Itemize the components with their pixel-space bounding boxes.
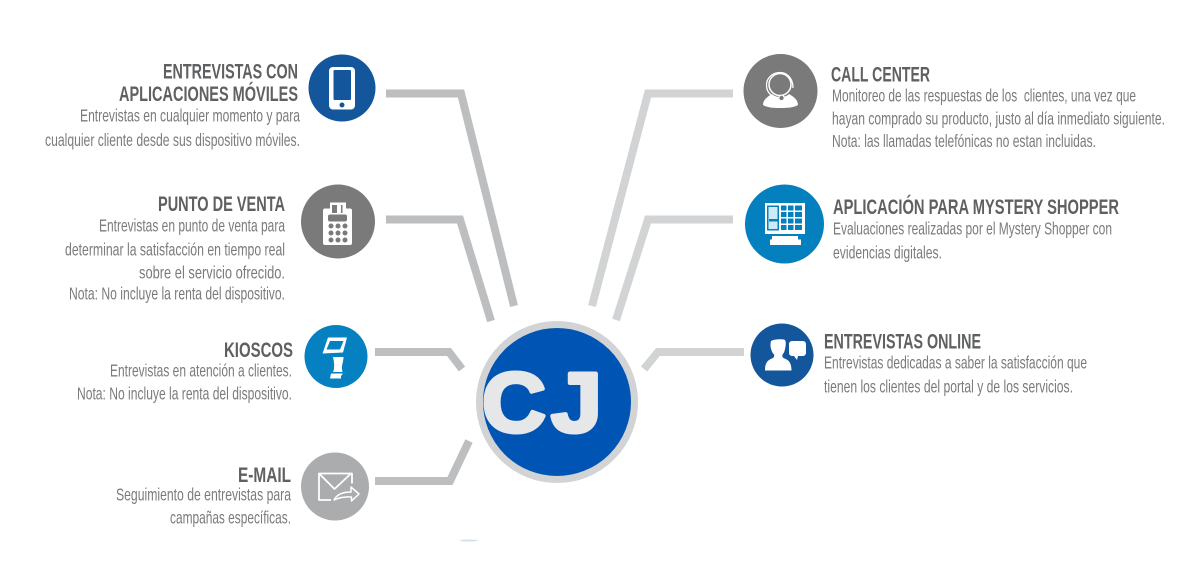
connector: call center xyxy=(592,94,733,306)
description: determinar la satisfacción en tiempo real xyxy=(65,240,285,260)
description: Entrevistas en atención a clientes. xyxy=(110,360,292,380)
description: Entrevistas dedicadas a saber la satisfacción que xyxy=(824,352,1087,372)
logo letters: C xyxy=(482,356,546,450)
icon: kiosk xyxy=(304,325,368,388)
description: sobre el servicio ofrecido. xyxy=(139,262,285,282)
item: entrevistas online xyxy=(750,324,1087,396)
connector: aplicaciones moviles xyxy=(386,94,514,306)
description: Nota: No incluye la renta del dispositivo. xyxy=(77,384,292,404)
icon: person with speech bubble xyxy=(750,324,814,386)
icon: smartphone xyxy=(308,54,376,122)
connector: mystery shopper xyxy=(616,220,733,320)
description xyxy=(65,216,285,304)
heading: KIOSCOS xyxy=(224,338,293,362)
icon: digital terminal xyxy=(745,184,824,264)
description: tienen los clientes del portal y de los servicios. xyxy=(824,376,1073,396)
description: Seguimiento de entrevistas para xyxy=(116,484,291,504)
heading: PUNTO DE VENTA xyxy=(158,192,285,216)
item: entrevistas con aplicaciones moviles xyxy=(45,54,376,150)
item: e-mail xyxy=(116,452,369,528)
description: Entrevistas en cualquier momento y para xyxy=(80,106,300,126)
description: evidencias digitales. xyxy=(833,242,942,262)
item: aplicacion para mystery shopper xyxy=(745,184,1119,264)
connector: punto de venta xyxy=(386,220,491,321)
description: Nota: No incluye la renta del dispositivo. xyxy=(69,284,285,304)
heading: CALL CENTER xyxy=(831,62,930,86)
icon: headset agent xyxy=(744,54,818,128)
item: call center xyxy=(744,54,1165,151)
heading: ENTREVISTAS CON xyxy=(163,60,298,84)
item: kioscos xyxy=(77,325,368,404)
icon: payment terminal xyxy=(301,184,375,258)
description xyxy=(832,86,1165,151)
heading: APLICACIONES MÓVILES xyxy=(119,81,298,106)
faint mark below logo xyxy=(460,540,478,542)
logo letters: J xyxy=(551,356,602,450)
description: cualquier cliente desde sus dispositivo móviles. xyxy=(45,130,300,150)
description: Entrevistas en punto de venta para xyxy=(99,216,285,236)
item: punto de venta xyxy=(65,184,375,304)
description xyxy=(45,106,300,150)
description xyxy=(116,484,291,528)
logo letters xyxy=(482,356,602,450)
heading: ENTREVISTAS ONLINE xyxy=(824,330,981,354)
connector: entrevistas online xyxy=(644,352,744,369)
description: campañas específicas. xyxy=(170,508,291,528)
description xyxy=(833,218,1112,262)
heading: E-MAIL xyxy=(238,463,291,487)
icon: envelope with arrow xyxy=(301,452,369,520)
connector: e-mail xyxy=(375,441,469,481)
description xyxy=(824,352,1087,396)
description xyxy=(77,360,292,404)
heading xyxy=(119,60,298,106)
connector: kioscos xyxy=(375,352,462,369)
central CJ logo xyxy=(480,324,634,480)
